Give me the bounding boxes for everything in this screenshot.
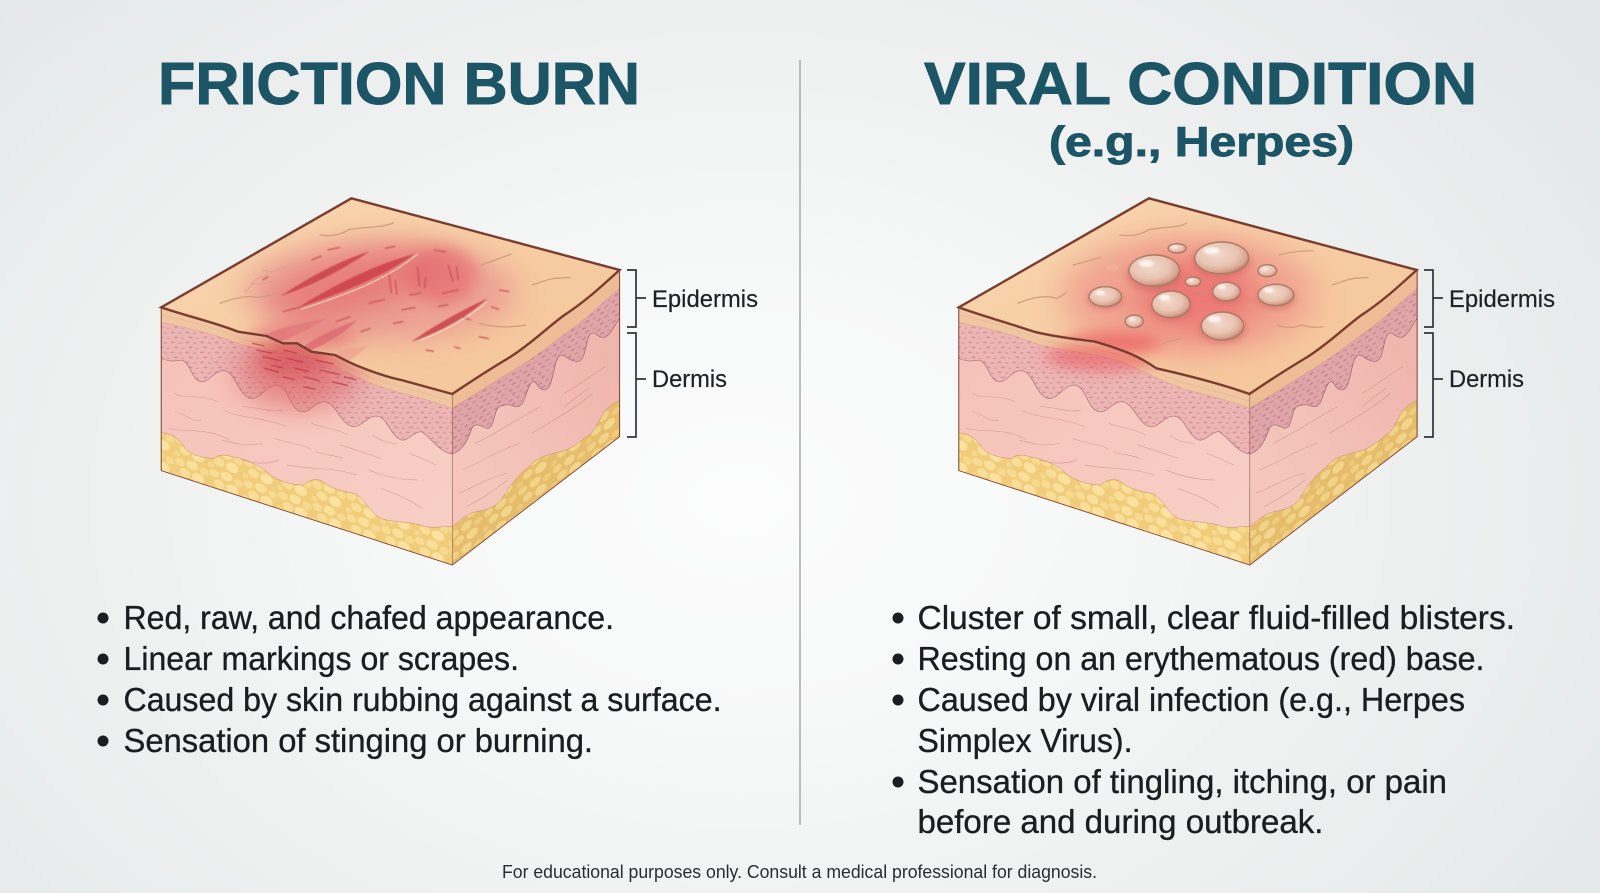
panel: viral condition	[892, 51, 1555, 840]
layer labels	[1424, 270, 1555, 437]
symptom list: viral condition: Resting on an erythematous (red) base.	[918, 640, 1484, 677]
symptom list: friction burn: Sensation of stinging or burning.	[124, 722, 593, 759]
symptom list: friction burn	[98, 599, 722, 759]
footer disclaimer: For educational purposes only. Consult a medical professional for diagnosis.	[502, 862, 1097, 882]
layer labels: Dermis	[652, 366, 727, 393]
layer labels: Epidermis	[652, 286, 758, 313]
layer labels: Epidermis	[1449, 286, 1555, 313]
symptom list: viral condition: Caused by viral infection (e.g., Herpes	[918, 681, 1465, 718]
redness on side layers	[1046, 342, 1160, 372]
heading: friction burn: FRICTION BURN	[158, 51, 640, 117]
abrasion redness and scrapes	[220, 223, 571, 363]
erythema base	[1018, 223, 1369, 357]
symptom list: viral condition: before and during outbreak.	[918, 803, 1324, 840]
symptom list: viral condition: Simplex Virus).	[918, 722, 1132, 759]
redness on side layers	[238, 330, 360, 410]
panel: friction burn	[98, 51, 758, 759]
subheading: e.g. herpes: (e.g., Herpes)	[1049, 118, 1354, 165]
symptom list: friction burn: Caused by skin rubbing against a surface.	[124, 681, 722, 718]
skin cross-section: viral condition	[959, 198, 1417, 565]
symptom list: viral condition: Cluster of small, clear fluid-filled blisters.	[918, 599, 1515, 636]
symptom list: viral condition	[892, 599, 1515, 840]
layer labels: Dermis	[1449, 366, 1524, 393]
center divider	[799, 60, 801, 825]
layer labels	[627, 270, 758, 437]
blisters	[1087, 242, 1296, 344]
skin surface	[161, 198, 620, 394]
surface outline	[959, 198, 1417, 394]
surface outline	[161, 198, 620, 394]
skin surface	[959, 198, 1417, 394]
symptom list: friction burn: Linear markings or scrapes.	[124, 640, 519, 677]
skin cross-section: friction burn	[161, 198, 620, 565]
symptom list: viral condition: Sensation of tingling, itching, or pain	[918, 763, 1447, 800]
symptom list: friction burn: Red, raw, and chafed appearance.	[124, 599, 614, 636]
heading: viral condition: VIRAL CONDITION	[924, 51, 1477, 117]
